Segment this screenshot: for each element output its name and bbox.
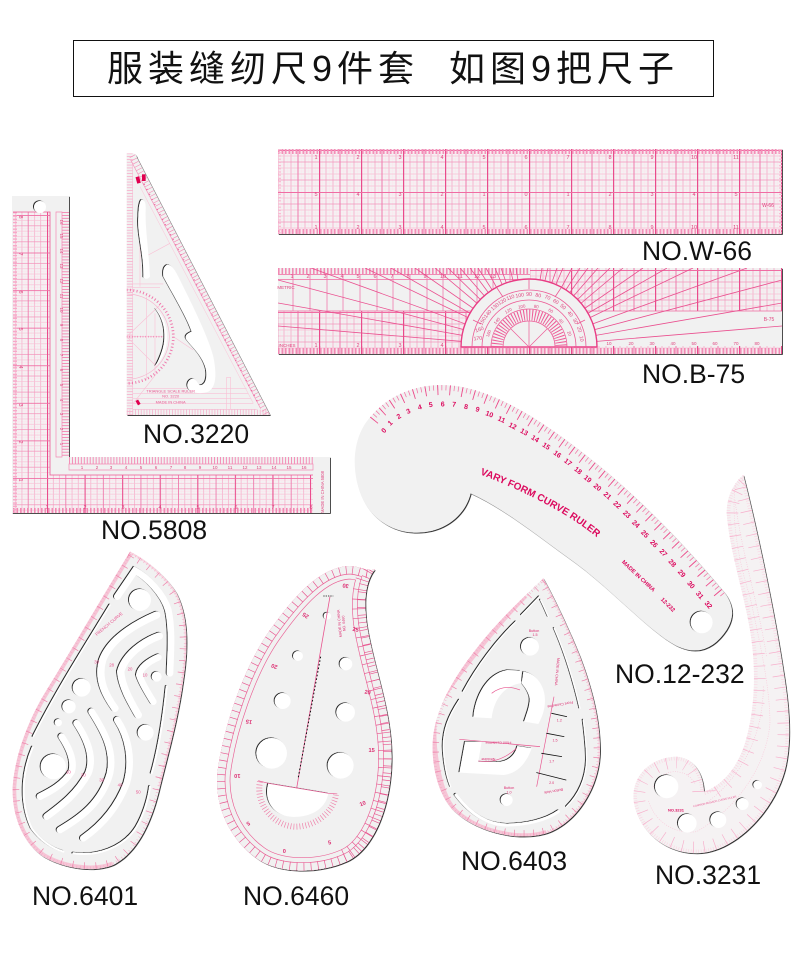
- grid arm vertical: [13, 212, 313, 513]
- ruler: NO.B-75 protractor ruler: 11: [457, 274, 463, 280]
- small print: COMMON FASHION CURVE RULER: [693, 794, 737, 808]
- scale numbers 0 to 32: 4: [417, 404, 423, 412]
- scale numbers 0 to 32: 25: [639, 529, 650, 540]
- ruler: NO.B-75 protractor ruler: METRIC: [277, 285, 295, 290]
- scale strips: 7: [59, 354, 64, 357]
- ruler: NO.W-66 straight grid ruler: 2: [608, 192, 612, 198]
- numbers: 7: [271, 505, 275, 511]
- made in china: MADE IN CHINA: [620, 560, 656, 594]
- ruler: NO.W-66 straight grid ruler: 7: [566, 155, 570, 161]
- label NO.6460: NO.6460: [243, 881, 349, 911]
- numbers: 4: [158, 505, 162, 511]
- label NO.3231: NO.3231: [655, 860, 761, 890]
- ruler: NO.B-75 protractor ruler: 6: [373, 274, 377, 280]
- numbers: 8: [309, 505, 313, 511]
- hanging hole: [691, 611, 713, 633]
- scale strips: 10: [59, 307, 64, 313]
- small print: 1.7: [549, 760, 554, 764]
- round holes: [41, 589, 162, 779]
- small print: MADE IN CHINA: [336, 609, 343, 637]
- ruler: NO.B-75 protractor ruler: 40: [670, 341, 676, 346]
- ruler: NO.W-66 straight grid ruler: 8: [608, 155, 612, 161]
- scale numbers 0 to 32: 5: [428, 402, 433, 409]
- edge scales: [127, 153, 270, 415]
- grid areas: [278, 268, 782, 354]
- double border lines: [217, 566, 392, 871]
- button hole marks: [537, 713, 567, 780]
- small print: Front Centerline: [547, 700, 573, 709]
- protractor: [461, 279, 597, 347]
- scale numbers 0 to 32: 7: [452, 402, 456, 409]
- ruler: NO.B-75 protractor ruler: 4: [440, 343, 444, 349]
- ruler: NO.W-66 straight grid ruler: 2: [356, 225, 360, 231]
- scale strips: 14: [59, 248, 64, 254]
- scale numbers: 5: [328, 840, 332, 847]
- ruler: NO.W-66 straight grid ruler: 1: [482, 192, 486, 198]
- scale numbers 0 to 32: 0: [381, 427, 389, 435]
- scale strips: 9: [199, 465, 202, 470]
- pink edge band: [433, 595, 547, 837]
- protractor numbers: 10: [578, 335, 584, 342]
- protractor numbers: [473, 292, 584, 342]
- scale strips: 1: [59, 443, 64, 446]
- ruler: NO.W-66 straight grid ruler: 1: [314, 225, 318, 231]
- ruler: NO.W-66 straight grid ruler: 9: [650, 155, 654, 161]
- tiny scale labels: 30: [99, 778, 105, 783]
- center scale line: [297, 596, 333, 788]
- label NO.12-232: NO.12-232: [615, 659, 745, 689]
- ruler: NO.B-75 protractor ruler: 10: [606, 341, 612, 346]
- radiating lines: [278, 268, 782, 347]
- small print: [336, 609, 347, 637]
- ruler: NO.B-75 protractor ruler: 3: [323, 274, 327, 280]
- interior guide lines: [127, 240, 253, 409]
- protractor numbers: 170: [473, 336, 483, 342]
- scale strips: 15: [59, 233, 64, 239]
- scale numbers 0 to 32: 15: [541, 442, 551, 452]
- ruler: NO.W-66 straight grid ruler: 5: [734, 192, 738, 198]
- ruler: NO.B-75 protractor ruler: INCHES: [278, 343, 296, 348]
- title box: 服装缝纫尺9件套 如图9把尺子: [107, 48, 679, 89]
- ruler: NO.W-66 straight grid ruler: 5: [482, 155, 486, 161]
- protractor numbers: 70: [544, 294, 551, 302]
- scale strips: 10: [212, 465, 218, 470]
- scale numbers: 5: [245, 819, 251, 826]
- scale numbers: 20: [364, 689, 371, 697]
- small print: 1.5: [552, 739, 558, 743]
- scale numbers 0 to 32: 19: [582, 474, 593, 485]
- ruler: NO.B-75 protractor ruler: 5: [356, 274, 360, 280]
- label NO.3220: NO.3220: [143, 419, 249, 449]
- red marks: [135, 174, 146, 405]
- protractor numbers: 100: [518, 303, 526, 310]
- scale numbers 0 to 32: 20: [592, 483, 602, 493]
- ruler: NO.B-75 protractor ruler: 2: [306, 274, 310, 280]
- ruler: NO.W-66 straight grid ruler: 0: [524, 192, 528, 198]
- numbers: 5: [17, 327, 23, 331]
- scale strips: 7: [170, 465, 173, 470]
- small print: MADE IN CHINA: [554, 658, 560, 686]
- protractor numbers: 30: [571, 317, 579, 326]
- numbers: 5: [196, 505, 200, 511]
- model number: NO.3231: [668, 807, 685, 812]
- protractor numbers: 140: [483, 309, 493, 320]
- ruler: NO.B-75 protractor ruler: 60: [712, 341, 718, 346]
- numbers: 4: [17, 365, 23, 369]
- protractor numbers: 120: [504, 306, 513, 315]
- scale strips: 11: [228, 465, 233, 470]
- model number: 12-232: [659, 597, 676, 614]
- protractor numbers: 80: [533, 304, 540, 310]
- numbers: [17, 215, 325, 513]
- scale strips: 2: [96, 465, 99, 470]
- scale strips: 2: [59, 428, 64, 431]
- ruler: NO.W-66 straight grid ruler: 4: [692, 192, 696, 198]
- tiny scale labels: 10: [66, 769, 71, 774]
- numbers: 2: [83, 505, 87, 511]
- tiny scale labels: 40: [118, 783, 123, 788]
- small print: TRIANGLE SCALE RULER: [146, 388, 195, 393]
- scale numbers: 30: [342, 581, 349, 588]
- title box: [74, 40, 714, 96]
- scale numbers 0 to 32: 18: [572, 466, 583, 476]
- scale strips: 3: [59, 413, 64, 416]
- protractor numbers: 100: [515, 292, 525, 300]
- ruler: NO.B-75 protractor ruler: 13: [490, 274, 496, 280]
- protractor arc: [127, 290, 173, 383]
- scale numbers 0 to 32: 21: [602, 491, 612, 501]
- ruler: NO.W-66 straight grid ruler: 6: [524, 155, 528, 161]
- holes: [655, 775, 762, 833]
- scale strips: 11: [59, 294, 64, 299]
- ruler: NO.W-66 straight grid ruler: 6: [524, 225, 528, 231]
- scale numbers 0 to 32: 26: [648, 539, 659, 550]
- protractor numbers: 110: [506, 294, 516, 302]
- ruler name: VARY FORM CURVE RULER: [482, 468, 600, 538]
- small print: 1.0: [506, 790, 512, 794]
- ruler: NO.B-75 protractor ruler: 1: [314, 343, 318, 349]
- curve cut-outs: [138, 200, 215, 393]
- ruler: NO.W-66 straight grid ruler: 3: [398, 225, 402, 231]
- tiny scale labels: 50: [136, 789, 141, 794]
- ruler: NO.B-75 protractor ruler: 7: [390, 274, 394, 280]
- ruler: NO.W-66 straight grid ruler: 11: [733, 225, 739, 231]
- protractor numbers: 130: [490, 302, 501, 312]
- numbers: 3: [17, 403, 23, 407]
- ruler: NO.12-232 vary form curve: [355, 385, 734, 652]
- protractor numbers: 50: [559, 303, 567, 311]
- scale strips: 5: [140, 465, 143, 470]
- curve ticks: [370, 385, 725, 593]
- scale numbers 0 to 32: 10: [484, 410, 494, 420]
- ruler: NO.B-75 protractor ruler: 9: [423, 274, 427, 280]
- numbers: 8: [17, 215, 23, 219]
- scale lines: [633, 475, 789, 853]
- ruler: NO.3220 triangle: [127, 153, 270, 415]
- numbers: 1: [45, 505, 49, 511]
- numbers: 7: [17, 252, 23, 256]
- tiny scale labels: [66, 611, 148, 794]
- scale strips: 4: [125, 465, 128, 470]
- ruler: NO.B-75 protractor ruler: [277, 268, 782, 354]
- scale numbers: 15: [246, 717, 253, 724]
- ruler: NO.B-75 protractor ruler: 70: [733, 341, 739, 346]
- scale numbers 0 to 32: 32: [703, 600, 713, 611]
- label NO.5808: NO.5808: [101, 515, 207, 545]
- scale numbers 0 to 32: 28: [667, 558, 677, 569]
- ruler: NO.B-75 protractor ruler: B-75: [764, 317, 774, 323]
- scale numbers 0 to 32: 22: [611, 500, 622, 511]
- scale strips: [56, 212, 313, 470]
- numbers: MADE IN CHINA 5808: [320, 470, 325, 513]
- tiny scale labels: FRENCH CURVE: [94, 611, 124, 637]
- ruler: NO.B-75 protractor ruler: 12: [474, 274, 480, 280]
- ruler: NO.B-75 protractor ruler: 30: [649, 341, 655, 346]
- scale strips: 13: [59, 263, 64, 269]
- ruler: NO.W-66 straight grid ruler: 2: [356, 155, 360, 161]
- protractor numbers: 90: [526, 292, 532, 298]
- small print: 2.0: [549, 781, 554, 785]
- scale numbers: 25: [302, 611, 310, 619]
- scale numbers 0 to 32: 13: [519, 428, 529, 438]
- protractor ticks: [258, 781, 337, 827]
- holes and protractor cut-out: [256, 612, 355, 817]
- numbers: 6: [17, 290, 23, 294]
- scale numbers: 0: [283, 849, 286, 855]
- protractor numbers: 160: [485, 329, 492, 338]
- scale strips: 14: [271, 465, 277, 470]
- scale numbers 0 to 32: 12: [507, 422, 517, 432]
- small print: Neckline: [481, 757, 495, 761]
- protractor numbers: 20: [575, 326, 583, 333]
- scale numbers: [234, 581, 375, 855]
- small print: NO. 6460: [341, 615, 347, 631]
- scale strips: 12: [59, 278, 64, 284]
- ruler: NO.W-66 straight grid ruler: 4: [440, 155, 444, 161]
- scale numbers 0 to 32: 16: [552, 450, 562, 460]
- protractor numbers: 20: [566, 330, 573, 337]
- scale numbers 0 to 32: 11: [496, 416, 506, 425]
- tiny scale labels: 10: [143, 673, 148, 678]
- scale numbers 0 to 32: 30: [685, 580, 696, 591]
- scale strips: 8: [59, 339, 64, 342]
- scale numbers: 20: [271, 662, 279, 669]
- scale strips: 5: [59, 384, 64, 387]
- tiny scale labels: 28: [109, 663, 115, 668]
- ruler: NO.W-66 straight grid ruler: W-66: [762, 203, 774, 209]
- scale numbers 0 to 32: 1: [387, 420, 395, 427]
- label NO.6401: NO.6401: [32, 881, 138, 911]
- scale numbers 0 to 32: 8: [463, 404, 469, 411]
- ruler: NO.5808 L-square: [12, 196, 330, 513]
- scale strips: 6: [59, 369, 64, 372]
- tiny scale labels: 20: [81, 773, 86, 778]
- ruler: NO.W-66 straight grid ruler: 1: [566, 192, 570, 198]
- ruler: NO.B-75 protractor ruler: 50: [691, 341, 697, 346]
- scale strips: 16: [301, 465, 307, 470]
- protractor numbers: 60: [547, 307, 555, 314]
- scale strips: 15: [286, 465, 292, 470]
- ruler: NO.B-75 protractor ruler: 20: [628, 341, 634, 346]
- tiny scale labels: 30: [94, 659, 100, 664]
- small print: 1.2: [557, 719, 562, 723]
- scale strips: 6: [155, 465, 158, 470]
- ruler: NO.W-66 straight grid ruler: 4: [356, 192, 360, 198]
- scale numbers 0 to 32: 6: [441, 401, 445, 408]
- ruler: NO.W-66 straight grid ruler: [278, 149, 782, 234]
- ruler: NO.W-66 straight grid ruler: 9: [650, 225, 654, 231]
- ruler: NO.B-75 protractor ruler: 80: [754, 341, 760, 346]
- ruler: NO.6403 teardrop curve: [433, 578, 600, 837]
- ruler: NO.W-66 straight grid ruler: 10: [691, 155, 697, 161]
- protractor numbers: 40: [566, 310, 574, 319]
- small print: NO. 3220: [162, 394, 180, 399]
- slots: [443, 597, 587, 825]
- scale numbers: 15: [368, 748, 375, 754]
- tiny scale labels: 20: [128, 667, 133, 672]
- scale numbers: 10: [359, 800, 367, 808]
- ruler: NO.W-66 straight grid ruler: 2: [440, 192, 444, 198]
- scale numbers 0 to 32: 24: [630, 519, 641, 530]
- protractor numbers: 80: [535, 293, 542, 299]
- protractor numbers: 120: [497, 297, 508, 307]
- scale numbers 0 to 32: 14: [530, 434, 540, 444]
- ruler: NO.B-75 protractor ruler: 8: [406, 274, 410, 280]
- scale numbers 0 to 32: 3: [406, 408, 412, 416]
- ruler: NO.W-66 straight grid ruler: 5: [314, 192, 318, 198]
- protractor numbers: 60: [551, 298, 560, 306]
- ruler: NO.B-75 protractor ruler: 10: [440, 274, 446, 280]
- label NO.W-66: NO.W-66: [642, 236, 752, 266]
- scale numbers 0 to 32: 29: [676, 569, 686, 579]
- small print: Button Hole: [544, 787, 563, 795]
- numbers: 2: [17, 440, 23, 444]
- small print: Button: [504, 786, 514, 790]
- small print: Button: [529, 629, 539, 633]
- protractor numbers: 160: [475, 326, 485, 334]
- small print: [146, 388, 195, 404]
- scale strips: 16: [59, 219, 64, 225]
- scale numbers 0 to 32: 17: [562, 458, 573, 468]
- scale numbers: 25: [352, 627, 359, 634]
- scale numbers: 10: [234, 772, 240, 778]
- pattern guide lines: [459, 688, 554, 787]
- ruler: NO.W-66 straight grid ruler: 4: [440, 225, 444, 231]
- small print: [481, 629, 573, 795]
- label NO.6403: NO.6403: [461, 846, 567, 876]
- scale numbers 0 to 32: 9: [475, 406, 480, 414]
- ruler: NO.W-66 straight grid ruler: 10: [691, 225, 697, 231]
- ruler: NO.W-66 straight grid ruler: 7: [566, 225, 570, 231]
- scale numbers 0 to 32: 31: [694, 590, 704, 601]
- protractor numbers: 140: [493, 316, 501, 325]
- scale strips: 1: [81, 465, 84, 470]
- small print: 1.5: [532, 633, 538, 637]
- hanging hole: [34, 201, 46, 213]
- scale strips: 12: [242, 465, 248, 470]
- ruler: NO.B-75 protractor ruler: 2: [356, 343, 360, 349]
- ruler: NO.B-75 protractor ruler: 3: [398, 343, 402, 349]
- scale numbers 0 to 32: 27: [658, 548, 668, 559]
- protractor numbers: 40: [558, 318, 565, 325]
- pink edge band: [13, 552, 130, 869]
- ruler: NO.B-75 protractor ruler: 4: [340, 274, 344, 280]
- scale numbers 0 to 32: 2: [396, 413, 403, 421]
- ruler: NO.6401 french curve: [13, 552, 186, 869]
- ruler: NO.W-66 straight grid ruler: 5: [482, 225, 486, 231]
- scale numbers 0 to 32: 23: [621, 510, 632, 520]
- ruler: NO.W-66 straight grid ruler: 3: [650, 192, 654, 198]
- scale strips: 8: [184, 465, 187, 470]
- pattern cut-outs: [459, 638, 545, 806]
- ruler: NO.6460 french curve: [217, 566, 392, 871]
- ruler: NO.B-75 protractor ruler: 1: [290, 274, 294, 280]
- protractor numbers: 150: [478, 316, 488, 327]
- ruler: NO.W-66 straight grid ruler: 8: [608, 225, 612, 231]
- scale strips: 4: [59, 399, 64, 402]
- label NO.B-75: NO.B-75: [642, 359, 745, 389]
- numbers: 1: [17, 478, 23, 482]
- scale numbers 0 to 32: [381, 401, 713, 611]
- ruler: NO.W-66 straight grid ruler: 1: [314, 155, 318, 161]
- scale strips: 9: [59, 324, 64, 327]
- small print: Front Centerline: [485, 741, 511, 745]
- ruler: NO.W-66 straight grid ruler: 3: [398, 155, 402, 161]
- cut-out slots: [24, 571, 171, 854]
- scale strips: 3: [110, 465, 113, 470]
- numbers: 6: [234, 505, 238, 511]
- scale strips: 13: [256, 465, 262, 470]
- small print: MADE IN CHINA: [156, 399, 186, 404]
- numbers: 3: [121, 505, 125, 511]
- ruler: NO.W-66 straight grid ruler: 3: [398, 192, 402, 198]
- ruler: NO.W-66 straight grid ruler: 11: [733, 155, 739, 161]
- ruler: NO.3231 curve: [633, 475, 789, 853]
